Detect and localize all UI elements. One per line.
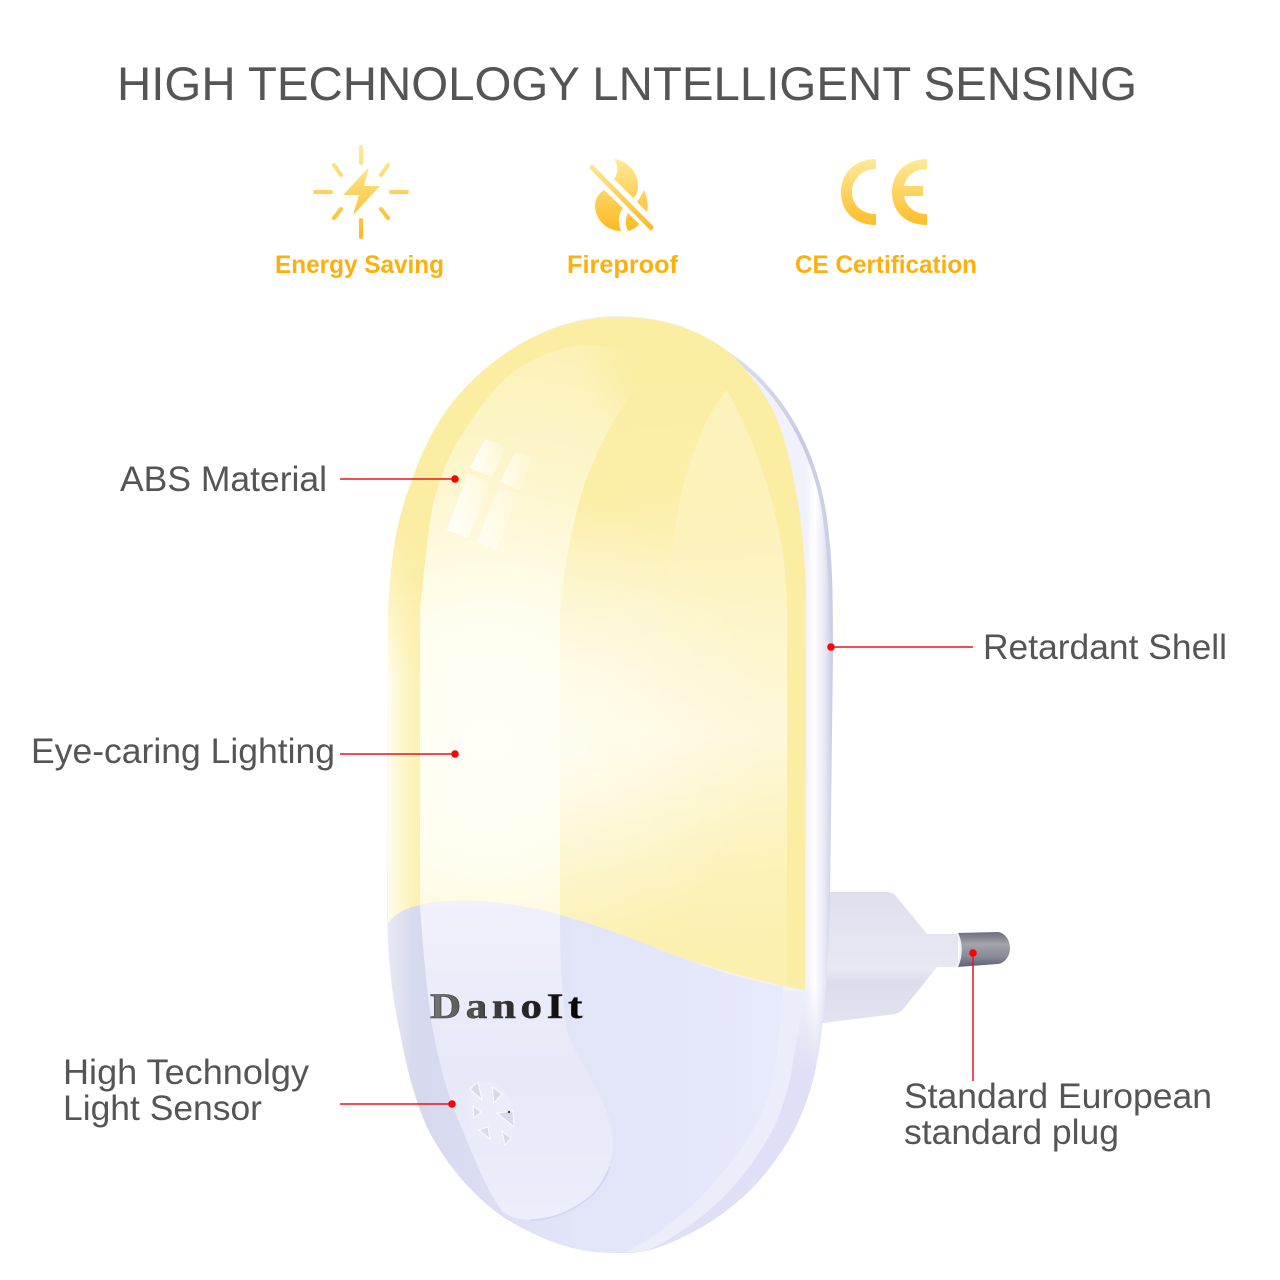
lens	[388, 317, 806, 990]
shell edge shading	[732, 354, 832, 584]
brand logo: DanoIt	[430, 986, 583, 1026]
callout: retardant shell: Retardant Shell	[983, 628, 1227, 667]
callout: retardant shell	[827, 628, 1227, 667]
label: energy saving: Energy Saving	[275, 251, 444, 279]
lower body	[388, 901, 783, 1253]
callout: abs material	[120, 460, 459, 499]
callout: high technology light sensor	[63, 1053, 456, 1128]
feature: ce certification	[795, 159, 977, 279]
callout: european plug: Standard European	[904, 1077, 1212, 1116]
callout: eye-caring lighting: Eye-caring Lighting	[31, 732, 335, 771]
label: ce certification: CE Certification	[795, 251, 977, 279]
front cover	[420, 901, 613, 1220]
cover shadow edge	[530, 1167, 610, 1220]
icon: crossed flame	[589, 159, 654, 231]
lower body band	[600, 990, 805, 1253]
callout: high technology light sensor: Light Sensor	[63, 1089, 262, 1128]
plug	[815, 892, 1010, 1024]
feature: energy saving	[275, 147, 444, 279]
title: HIGH TECHNOLOGY LNTELLIGENT SENSING	[117, 57, 1137, 110]
callout: european plug	[904, 949, 1212, 1152]
label: fireproof: Fireproof	[567, 251, 679, 279]
lower shell crescent	[613, 985, 826, 1253]
window reflection	[447, 439, 532, 550]
callout: abs material: ABS Material	[120, 460, 327, 499]
product: night light	[380, 240, 1010, 1253]
shell	[387, 316, 833, 1253]
callout: high technology light sensor: High Technolgy	[63, 1053, 310, 1092]
sensor	[459, 1075, 523, 1151]
icon: lightning with rays	[315, 147, 407, 237]
callout: european plug: standard plug	[904, 1113, 1119, 1152]
feature: fireproof	[567, 159, 679, 279]
icon: CE mark	[841, 159, 927, 225]
